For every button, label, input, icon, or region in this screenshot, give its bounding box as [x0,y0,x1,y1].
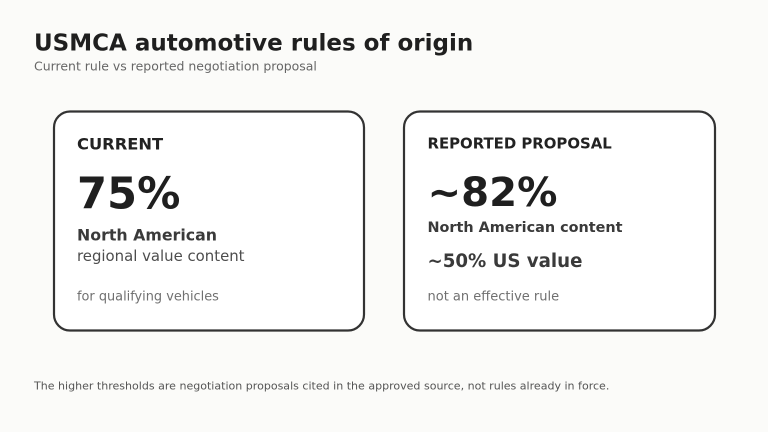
panel: current [54,112,364,330]
proposal US value: ~50% US value [428,251,582,272]
current note: for qualifying vehicles [77,290,219,304]
current value: 75% [77,170,180,220]
current label: North American [77,226,217,244]
footnote: The higher thresholds are negotiation proposals cited in the approved source, not rules already in force. [33,380,609,392]
proposal heading: REPORTED PROPOSAL [428,134,612,152]
current heading: CURRENT [77,134,164,154]
subtitle: Current rule vs reported negotiation proposal [34,58,317,74]
title: USMCA automotive rules of origin [34,30,473,56]
panel: reported proposal [404,112,715,330]
current description: regional value content [77,247,245,265]
proposal label: North American content [428,220,623,236]
proposal value: ~82% [428,170,557,216]
proposal note: not an effective rule [428,290,559,304]
